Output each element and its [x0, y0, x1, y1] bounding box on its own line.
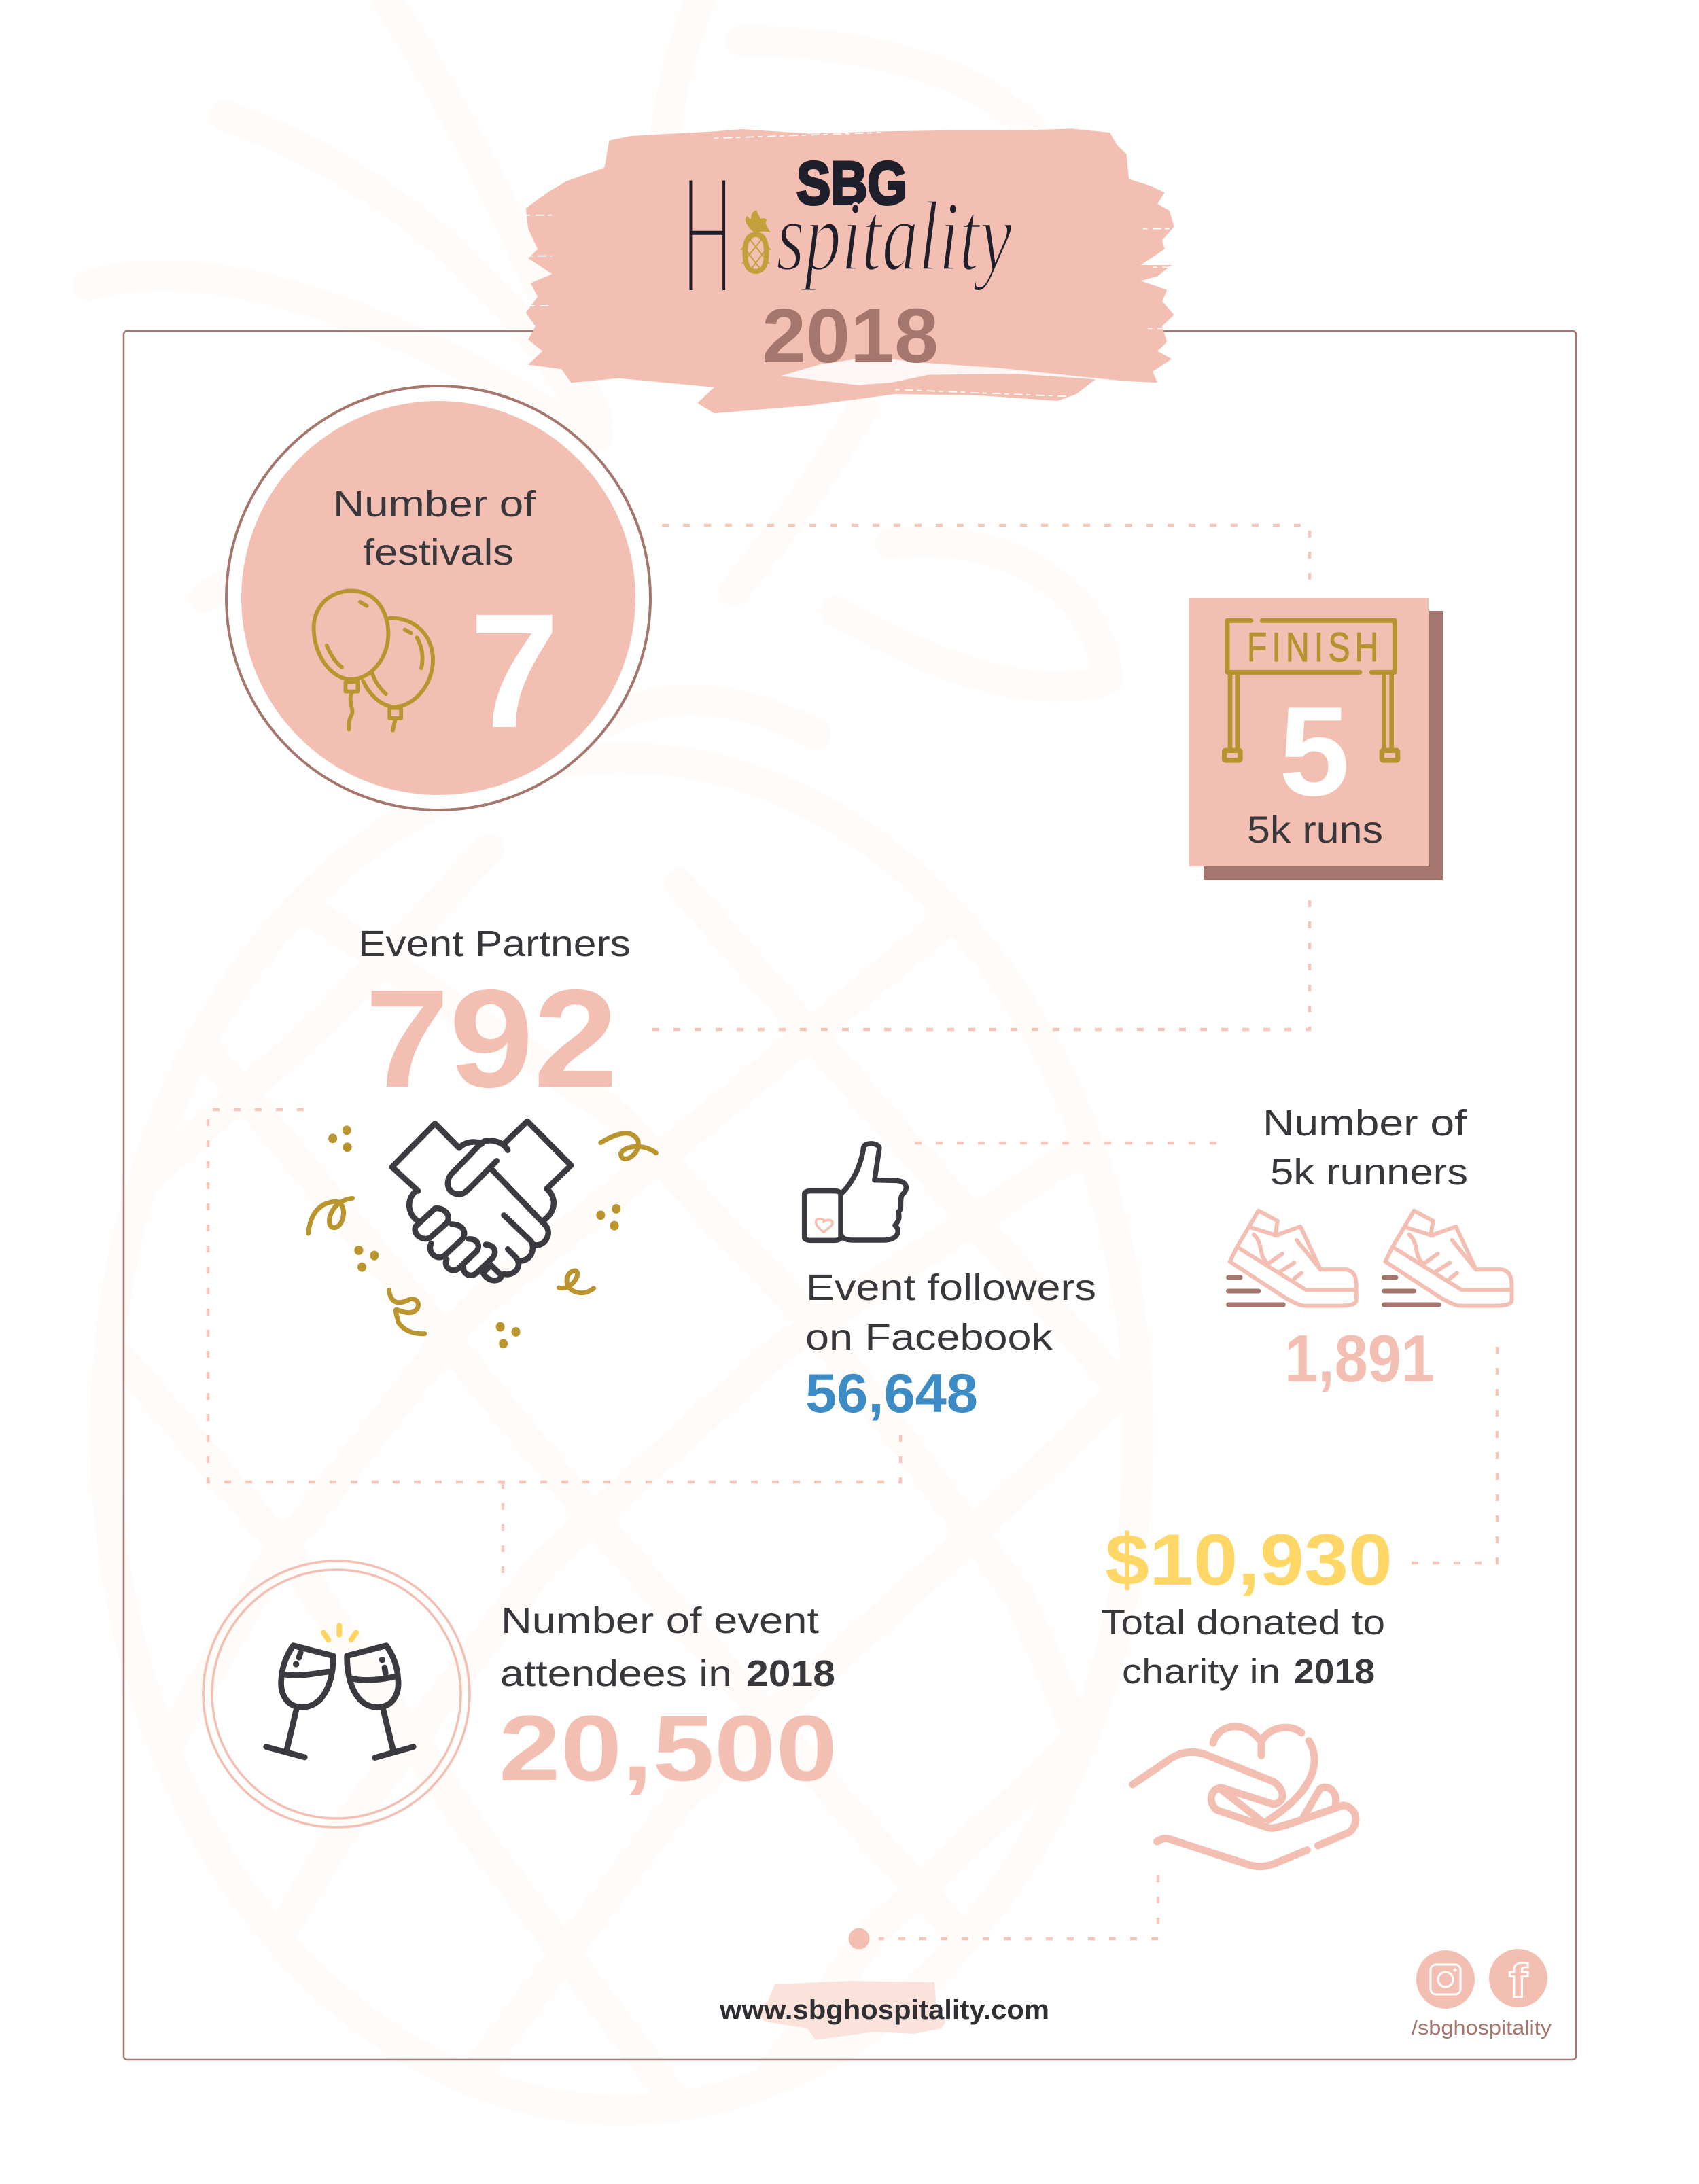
followers label	[805, 1267, 1096, 1358]
background pineapple watermark	[88, 0, 1223, 2110]
icon: clinking wine glasses	[266, 1625, 413, 1758]
footer brush	[756, 1981, 946, 2040]
double ring	[203, 1561, 470, 1827]
icon: handshake	[392, 1121, 571, 1280]
brush stroke background	[526, 128, 1174, 413]
panel: charity donations	[1101, 1519, 1393, 1867]
donation label	[1101, 1603, 1385, 1691]
social handle: /sbghospitality	[1412, 2017, 1552, 2039]
website footer	[719, 1981, 1049, 2040]
panel: event attendees	[203, 1561, 837, 1827]
script spitality: spitality	[776, 181, 1013, 292]
attendees label: 2018	[746, 1653, 835, 1694]
social links	[1412, 1949, 1552, 2039]
end marker dot	[848, 1928, 870, 1949]
SBG wordmark: SBG	[796, 149, 907, 217]
attendees label: attendees in	[500, 1653, 732, 1694]
panel: 5k runs	[1189, 598, 1443, 880]
5k count: 5	[1279, 680, 1350, 822]
icon: facebook	[1489, 1949, 1547, 2007]
icon: finish gantry	[1225, 620, 1398, 760]
festival count: 7	[470, 580, 559, 762]
donation amount: $10,930	[1105, 1519, 1393, 1600]
icon: instagram	[1416, 1950, 1475, 2009]
festival label: Number of	[333, 484, 536, 525]
attendees label	[500, 1600, 835, 1694]
donation label: charity in	[1122, 1652, 1280, 1691]
attendees count: 20,500	[499, 1697, 837, 1801]
runners label: Number of	[1263, 1103, 1467, 1144]
runners label	[1263, 1103, 1468, 1193]
pineapple letter o: o	[740, 205, 771, 289]
panel: 5k runners	[1229, 1103, 1511, 1396]
partners label: Event Partners	[358, 923, 631, 964]
year 2018: 2018	[762, 293, 939, 378]
website address: www.sbghospitality.com	[719, 1995, 1049, 2025]
festival label	[333, 484, 536, 573]
icon: confetti	[309, 1125, 656, 1348]
dashed connector lines	[208, 525, 1497, 1939]
donation label: Total donated to	[1101, 1603, 1385, 1642]
header brush logo	[526, 128, 1174, 413]
runners count: 1,891	[1284, 1321, 1435, 1396]
icon: thumbs up	[805, 1144, 906, 1240]
attendees label: Number of event	[501, 1600, 819, 1641]
donation label: 2018	[1294, 1652, 1375, 1691]
finish sign text: FINISH	[1247, 624, 1384, 670]
script H: H	[682, 139, 733, 332]
panel: facebook followers	[805, 1144, 1096, 1424]
icon: running shoes	[1229, 1211, 1511, 1306]
partners count: 792	[365, 961, 618, 1116]
card	[1189, 598, 1429, 866]
icon: balloons	[314, 591, 433, 730]
icon: facebook: f	[1509, 1954, 1528, 2007]
followers count: 56,648	[805, 1363, 978, 1424]
runners label: 5k runners	[1270, 1152, 1468, 1193]
panel: number of festivals	[226, 386, 650, 810]
outer frame	[124, 331, 1576, 2060]
panel: event partners	[309, 923, 656, 1348]
festival circle	[226, 386, 650, 810]
infographic canvas	[122, 128, 1577, 2060]
5k label: 5k runs	[1247, 808, 1383, 851]
followers label: on Facebook	[805, 1317, 1053, 1358]
followers label: Event followers	[806, 1267, 1096, 1308]
festival label: festivals	[363, 532, 514, 573]
icon: hand holding heart	[1133, 1727, 1356, 1867]
card shadow	[1204, 611, 1443, 880]
